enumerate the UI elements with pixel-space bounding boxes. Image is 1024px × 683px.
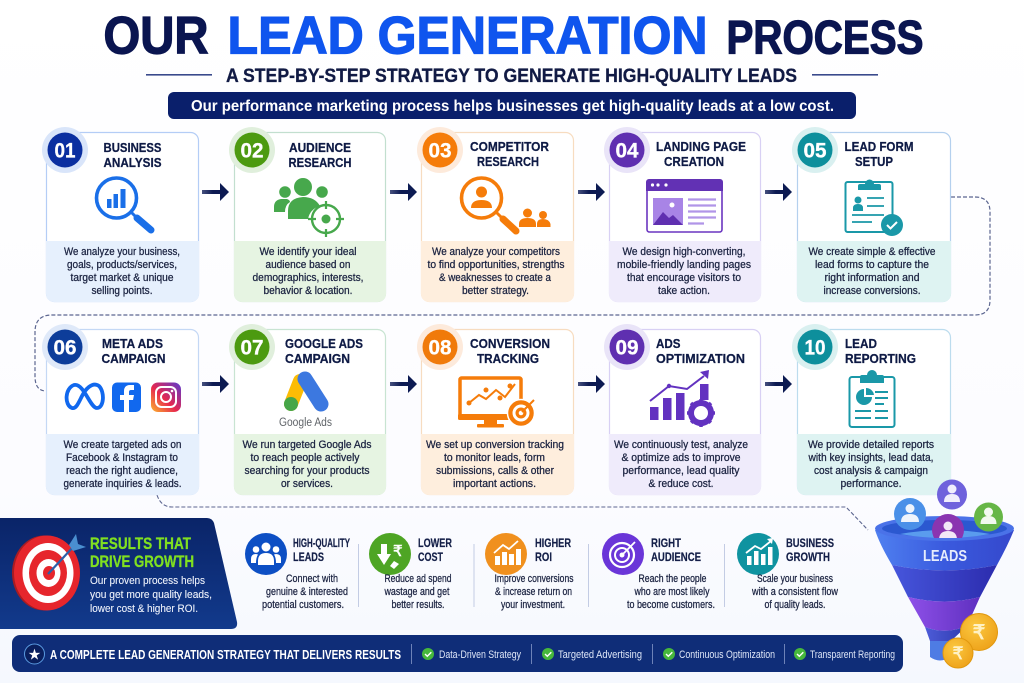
title: OUR: [104, 6, 208, 66]
description 03: to find opportunities, strengths: [428, 259, 564, 271]
heading 09: ADS: [656, 336, 681, 351]
icon: conversion tracking monitor: [458, 378, 534, 428]
heading 09: OPTIMIZATION: [656, 351, 745, 366]
badge 06: [42, 324, 88, 370]
intro banner: [168, 92, 856, 119]
description 03: & weaknesses to create a: [439, 272, 551, 284]
heading 04: LANDING PAGE: [656, 139, 746, 154]
description 06: generate inquiries & leads.: [64, 478, 182, 490]
icon: magnifier with bars: [96, 178, 151, 230]
heading 04: [656, 139, 746, 169]
step 03 card: [417, 127, 574, 302]
heading 06: CAMPAIGN: [102, 351, 166, 366]
text: who are most likely: [634, 586, 710, 598]
icon: star badge: ★: [28, 646, 41, 664]
badge 01: [42, 127, 88, 173]
text results: Our proven process helps: [90, 575, 206, 587]
benefit: higher ROI: [485, 533, 574, 611]
bottom strategy bar: [12, 635, 903, 672]
heading: [651, 536, 701, 564]
description 09: We continuously test, analyze: [614, 439, 748, 451]
icon: competitor magnifier: [462, 178, 550, 231]
badge 03: 03: [428, 140, 452, 162]
heading: COST: [418, 550, 443, 564]
description 09: performance, lead quality: [622, 465, 740, 477]
icon: audience target: [274, 178, 344, 237]
title: PROCESS: [726, 10, 924, 64]
description 05: right information and: [824, 272, 920, 284]
coins: [943, 614, 998, 668]
description 07: searching for your products: [244, 465, 370, 477]
description 01: We analyze your business,: [64, 246, 180, 258]
heading 03: RESEARCH: [477, 154, 539, 169]
description 08: We set up conversion tracking: [426, 439, 564, 451]
heading 10: LEAD: [845, 336, 877, 351]
description 10: [808, 439, 934, 490]
icon: ads optimization chart and gear: [650, 370, 715, 427]
icon: Google Ads logo: [279, 379, 332, 429]
item: data-driven strategy: [422, 648, 521, 661]
text: genuine & interested: [266, 586, 348, 598]
badge 09: [604, 324, 650, 370]
step 01 card: [42, 127, 199, 302]
heading 10: REPORTING: [845, 351, 916, 366]
text: [384, 573, 452, 611]
title: LEAD GENERATION: [228, 6, 708, 66]
heading results: [90, 535, 194, 571]
icon: target circle: [602, 533, 644, 575]
description 04: mobile-friendly landing pages: [617, 259, 751, 271]
badge 04: 04: [616, 140, 639, 162]
heading 05: LEAD FORM: [844, 139, 914, 154]
panel: results that drive growth: [0, 518, 237, 629]
icon: growth circle: [737, 533, 779, 575]
badge 07: 07: [240, 336, 264, 360]
description 06: [64, 439, 182, 490]
badge 04: [604, 127, 650, 173]
badge 10: [792, 324, 838, 370]
text: potential customers.: [262, 599, 344, 611]
heading: [418, 536, 452, 564]
heading 04: CREATION: [664, 154, 724, 169]
heading: [786, 536, 834, 564]
item: continuous optimization: Continuous Optimization: [679, 649, 775, 661]
benefit: lower cost: [369, 533, 452, 611]
description 03: [428, 246, 564, 297]
heading 05: [844, 139, 914, 169]
badge 09: 09: [616, 336, 638, 360]
heading: LOWER: [418, 536, 452, 550]
heading results: DRIVE GROWTH: [90, 553, 194, 571]
description 04: [617, 246, 751, 297]
description 02: demographics, interests,: [252, 272, 364, 284]
lead avatars: [894, 480, 1003, 538]
description 04: take action.: [658, 285, 710, 297]
badge 02: [229, 127, 275, 173]
heading: RIGHT: [651, 536, 682, 550]
item: continuous optimization: [663, 648, 775, 661]
heading 07: GOOGLE ADS: [285, 336, 363, 351]
text: Reduce ad spend: [384, 573, 452, 585]
description 10: performance.: [840, 478, 902, 490]
step 07 card: [229, 324, 386, 495]
description 08: submissions, calls & other: [436, 465, 554, 477]
description 04: that encourage visitors to: [627, 272, 741, 284]
text results: lower cost & higher ROI.: [90, 603, 198, 615]
step 02 card: [229, 127, 386, 302]
description 07: to reach people actively: [250, 452, 360, 464]
connector: row 1 to row 2: [35, 197, 990, 391]
heading 07: CAMPAIGN: [285, 351, 350, 366]
text: [751, 573, 838, 611]
icon: social logos: [67, 382, 181, 412]
description 01: [64, 246, 180, 297]
heading 07: [285, 336, 363, 366]
heading 08: TRACKING: [477, 351, 539, 366]
bar heading: A COMPLETE LEAD GENERATION STRATEGY THAT DELIVERS RESULTS: [50, 648, 401, 662]
heading 01: [104, 140, 162, 170]
badge 07: [229, 324, 275, 370]
icon: report clipboard: [850, 370, 894, 427]
heading 05: SETUP: [855, 154, 893, 169]
text: Improve conversions: [494, 573, 574, 585]
heading 03: [470, 139, 550, 169]
heading 08: CONVERSION: [470, 336, 550, 351]
item: data-driven strategy: Data-Driven Strategy: [439, 649, 521, 661]
text: [494, 573, 574, 611]
description 06: reach the right audience,: [66, 465, 178, 477]
heading: HIGH-QUALITY: [293, 536, 350, 550]
connector: row 2 to funnel: [157, 495, 868, 530]
description 08: to monitor leads, form: [444, 452, 545, 464]
badge 02: 02: [240, 140, 264, 162]
step 09 card: [604, 324, 761, 495]
description 10: cost analysis & campaign: [814, 465, 928, 477]
benefit: business growth: [737, 533, 838, 611]
description 07: or services.: [281, 478, 333, 490]
heading: BUSINESS: [786, 536, 834, 550]
description 09: & reduce cost.: [648, 478, 714, 490]
badge 05: 05: [804, 140, 827, 162]
icon: target with dart: [12, 534, 86, 610]
step 10 card: [792, 324, 951, 495]
arrows row 1: [202, 183, 792, 201]
benefit: right audience: [602, 533, 715, 611]
item: transparent reporting: [794, 648, 895, 661]
funnel label: LEADS: [923, 548, 967, 565]
description 02: audience based on: [266, 259, 351, 271]
description 03: better strategy.: [462, 285, 529, 297]
badge 08: 08: [428, 336, 452, 360]
description 06: We create targeted ads on: [64, 439, 182, 451]
step 08 card: [417, 324, 574, 495]
text: Connect with: [286, 573, 338, 585]
heading 08: [470, 336, 550, 366]
heading 02: [288, 140, 352, 170]
description 09: [614, 439, 748, 490]
heading 06: META ADS: [102, 336, 163, 351]
heading 03: COMPETITOR: [470, 139, 550, 154]
badge 10: 10: [804, 336, 826, 360]
text results: you get more quality leads,: [90, 589, 212, 601]
badge 08: [417, 324, 463, 370]
heading: AUDIENCE: [651, 550, 701, 564]
funnel: [875, 480, 1014, 668]
heading: HIGHER: [535, 536, 571, 550]
text: better results.: [392, 599, 444, 611]
benefit: high-quality leads: [245, 533, 350, 611]
coins: ₹: [973, 622, 986, 644]
description 05: lead forms to capture the: [815, 259, 929, 271]
heading: [293, 536, 350, 564]
description 07: [242, 439, 372, 490]
heading 02: AUDIENCE: [289, 140, 351, 155]
heading 01: BUSINESS: [104, 140, 162, 155]
heading: LEADS: [293, 550, 324, 564]
text: & increase return on: [495, 586, 572, 598]
step 04 card: [604, 127, 761, 302]
badge 01: 01: [54, 140, 76, 162]
item: transparent reporting: Transparent Reporting: [810, 649, 895, 661]
text results: [90, 575, 212, 615]
text: Scale your business: [757, 573, 833, 585]
title: [104, 6, 924, 66]
heading 02: RESEARCH: [288, 155, 352, 170]
description 08: [426, 439, 564, 490]
step 06 card: [42, 324, 199, 495]
heading 06: [102, 336, 166, 366]
coins: ₹: [953, 644, 964, 663]
icon: people circle: [245, 533, 287, 575]
description 05: We create simple & effective: [808, 246, 936, 258]
text: of quality leads.: [764, 599, 826, 611]
description 02: We identify your ideal: [260, 246, 356, 258]
description 02: behavior & location.: [264, 285, 352, 297]
text: to become customers.: [627, 599, 715, 611]
heading 10: [845, 336, 916, 366]
heading: [535, 536, 571, 564]
description 02: [252, 246, 364, 297]
description 05: increase conversions.: [824, 285, 920, 297]
badge 03: [417, 127, 463, 173]
description 03: We analyze your competitors: [432, 246, 560, 258]
icon: landing page browser: [646, 179, 723, 232]
badge 05: [792, 127, 838, 173]
badge 06: 06: [54, 336, 76, 360]
item: targeted advertising: [542, 648, 642, 661]
text: Reach the people: [638, 573, 707, 585]
description 06: Facebook & Instagram to: [66, 452, 178, 464]
text: [262, 573, 348, 611]
description 01: selling points.: [92, 285, 152, 297]
description 09: & optimize ads to improve: [622, 452, 741, 464]
text: with a consistent flow: [751, 586, 838, 598]
heading: GROWTH: [786, 550, 830, 564]
item: targeted advertising: Targeted Advertising: [558, 649, 642, 661]
intro banner: Our performance marketing process helps businesses get high-quality leads at a low cost.: [191, 98, 834, 115]
heading 09: [656, 336, 745, 366]
description 08: important actions.: [453, 478, 536, 490]
icon: down arrow and rupee: ₹: [393, 543, 403, 560]
subtitle: A STEP-BY-STEP STRATEGY TO GENERATE HIGH-QUALITY LEADS: [226, 65, 797, 87]
step 05 card: [792, 127, 951, 302]
description 07: We run targeted Google Ads: [242, 439, 372, 451]
icon: Google Ads logo: Google Ads: [279, 417, 332, 429]
text: your investment.: [501, 599, 565, 611]
description 05: [808, 246, 936, 297]
arrows row 2: [202, 375, 792, 393]
description 01: target market & unique: [70, 272, 174, 284]
icon: lead form clipboard: [846, 180, 903, 236]
description 04: We design high-converting,: [622, 246, 746, 258]
description 10: with key insights, lead data,: [808, 452, 934, 464]
icon: chart circle: [485, 533, 527, 575]
text: [627, 573, 715, 611]
icon: star badge: [24, 644, 44, 664]
heading results: RESULTS THAT: [90, 535, 191, 553]
heading 01: ANALYSIS: [104, 155, 162, 170]
text: wastage and get: [384, 586, 450, 598]
description 10: We provide detailed reports: [808, 439, 934, 451]
heading: ROI: [535, 550, 552, 564]
description 01: goals, products/services,: [67, 259, 177, 271]
funnel body: [875, 516, 1014, 660]
